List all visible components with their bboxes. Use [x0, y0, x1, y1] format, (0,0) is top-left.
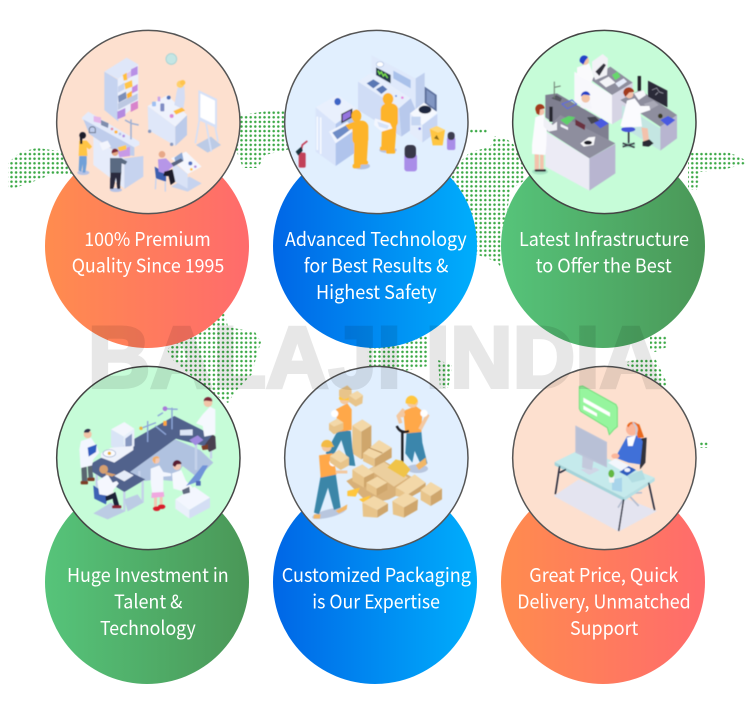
- green circle: [45, 480, 249, 684]
- seated woman on stool: [620, 87, 654, 148]
- lower boxes: [362, 493, 418, 518]
- back counter: [574, 54, 633, 124]
- blue circle: [273, 144, 477, 348]
- dotted world map background: [8, 110, 745, 448]
- middle scientist: [580, 91, 591, 108]
- caption: latest infrastructure: to Offer the Best: [536, 251, 672, 279]
- person: seated at desk with laptop: [155, 151, 202, 192]
- panel: advanced technology: [273, 144, 477, 348]
- worker in suit at machine: [345, 110, 370, 169]
- tall box: [352, 419, 371, 459]
- desktop monitor: [575, 425, 607, 475]
- caption: latest infrastructure: Latest Infrastructure: [519, 224, 689, 252]
- caption: customized packaging: is Our Expertise: [312, 587, 440, 615]
- caption: huge investment: Talent &: [114, 587, 182, 615]
- lab bench with standing scientist: [148, 80, 187, 146]
- flip board: [195, 90, 221, 153]
- orange circle: [45, 144, 249, 348]
- worker carrying box: [326, 385, 363, 466]
- caption: great price: Delivery, Unmatched: [517, 587, 691, 615]
- control console: [358, 55, 425, 137]
- caption: great price: Great Price, Quick: [529, 560, 679, 588]
- caption: huge investment: Technology: [100, 613, 196, 641]
- person: scientist with clipboard: [79, 429, 99, 484]
- caption: huge investment: Huge Investment in: [67, 560, 229, 588]
- caption: advanced technology: Highest Safety: [316, 277, 437, 305]
- worker in suit carrying tray: [374, 93, 398, 154]
- person: scientist at far end: [196, 397, 216, 452]
- front counter: [545, 82, 615, 191]
- storage shelf: [104, 58, 138, 122]
- caption: premium quality: 100% Premium: [84, 224, 211, 252]
- papers on table: [114, 429, 203, 481]
- icon: green speech bubble: [579, 386, 617, 435]
- long counter with shelf: [82, 112, 143, 189]
- pallet and stacked boxes: [346, 461, 426, 504]
- illustration: protective suit technicians at machines: [285, 30, 468, 214]
- table legs: [97, 439, 211, 511]
- person and computer cart: [172, 460, 210, 519]
- right corner box: [421, 482, 442, 506]
- fire extinguisher: [296, 141, 307, 168]
- illustration: team at L-shaped lab table: [57, 366, 240, 550]
- illustration: customer support agent at glass desk: [513, 366, 696, 550]
- caption: great price: Support: [570, 613, 638, 641]
- wide box: [363, 440, 392, 467]
- caption: customized packaging: Customized Packaging: [282, 560, 471, 588]
- illustration: warehouse workers with cardboard boxes: [285, 366, 468, 550]
- bench leg shadow: [93, 503, 125, 519]
- lamp post: [125, 119, 139, 139]
- blue circle: [273, 480, 477, 684]
- panel: huge investment: [45, 480, 249, 684]
- panel: great price: [501, 480, 705, 684]
- person: man in navy shirt: [110, 149, 127, 192]
- floor shadow: [128, 439, 213, 481]
- panel: customized packaging: [273, 480, 477, 684]
- lab glassware: [139, 406, 178, 442]
- large gas canister: [404, 145, 417, 171]
- orange circle: [501, 480, 705, 684]
- right counter: [620, 76, 677, 151]
- worker with pallet jack: [387, 396, 428, 478]
- worker walking with box: [311, 440, 349, 521]
- person: woman in yellow shirt: [77, 132, 92, 175]
- sink machine: [316, 95, 357, 166]
- person: seated woman: [93, 465, 121, 508]
- panel: premium quality: [45, 144, 249, 348]
- oven and centrifuge: [101, 422, 134, 463]
- icon: wall clock: [166, 54, 177, 64]
- caption: premium quality: Quality Since 1995: [72, 251, 224, 279]
- caption: advanced technology: for Best Results &: [304, 251, 448, 279]
- L-shaped table: [89, 416, 215, 492]
- office chair: [618, 438, 647, 508]
- agent with headset: [611, 422, 644, 464]
- illustration: scientists at grey lab counters: [513, 30, 696, 214]
- glass desk: [555, 449, 655, 531]
- person: woman in pink skirt: [151, 456, 171, 511]
- icon: potted cactus: [608, 470, 615, 483]
- caption: advanced technology: Advanced Technology: [285, 224, 467, 252]
- illustration: laboratory staff at shelves and benches: [57, 30, 240, 214]
- floor mat: [554, 479, 657, 532]
- woman in lab coat: [532, 104, 557, 175]
- centrifuge machine: [410, 87, 437, 143]
- panel: latest infrastructure: [501, 144, 705, 348]
- green circle: [501, 144, 705, 348]
- hazard bin: [430, 126, 445, 145]
- small gas canister: [447, 132, 455, 150]
- watermark: BALAJI INDIA: BALAJI INDIA: [88, 310, 662, 406]
